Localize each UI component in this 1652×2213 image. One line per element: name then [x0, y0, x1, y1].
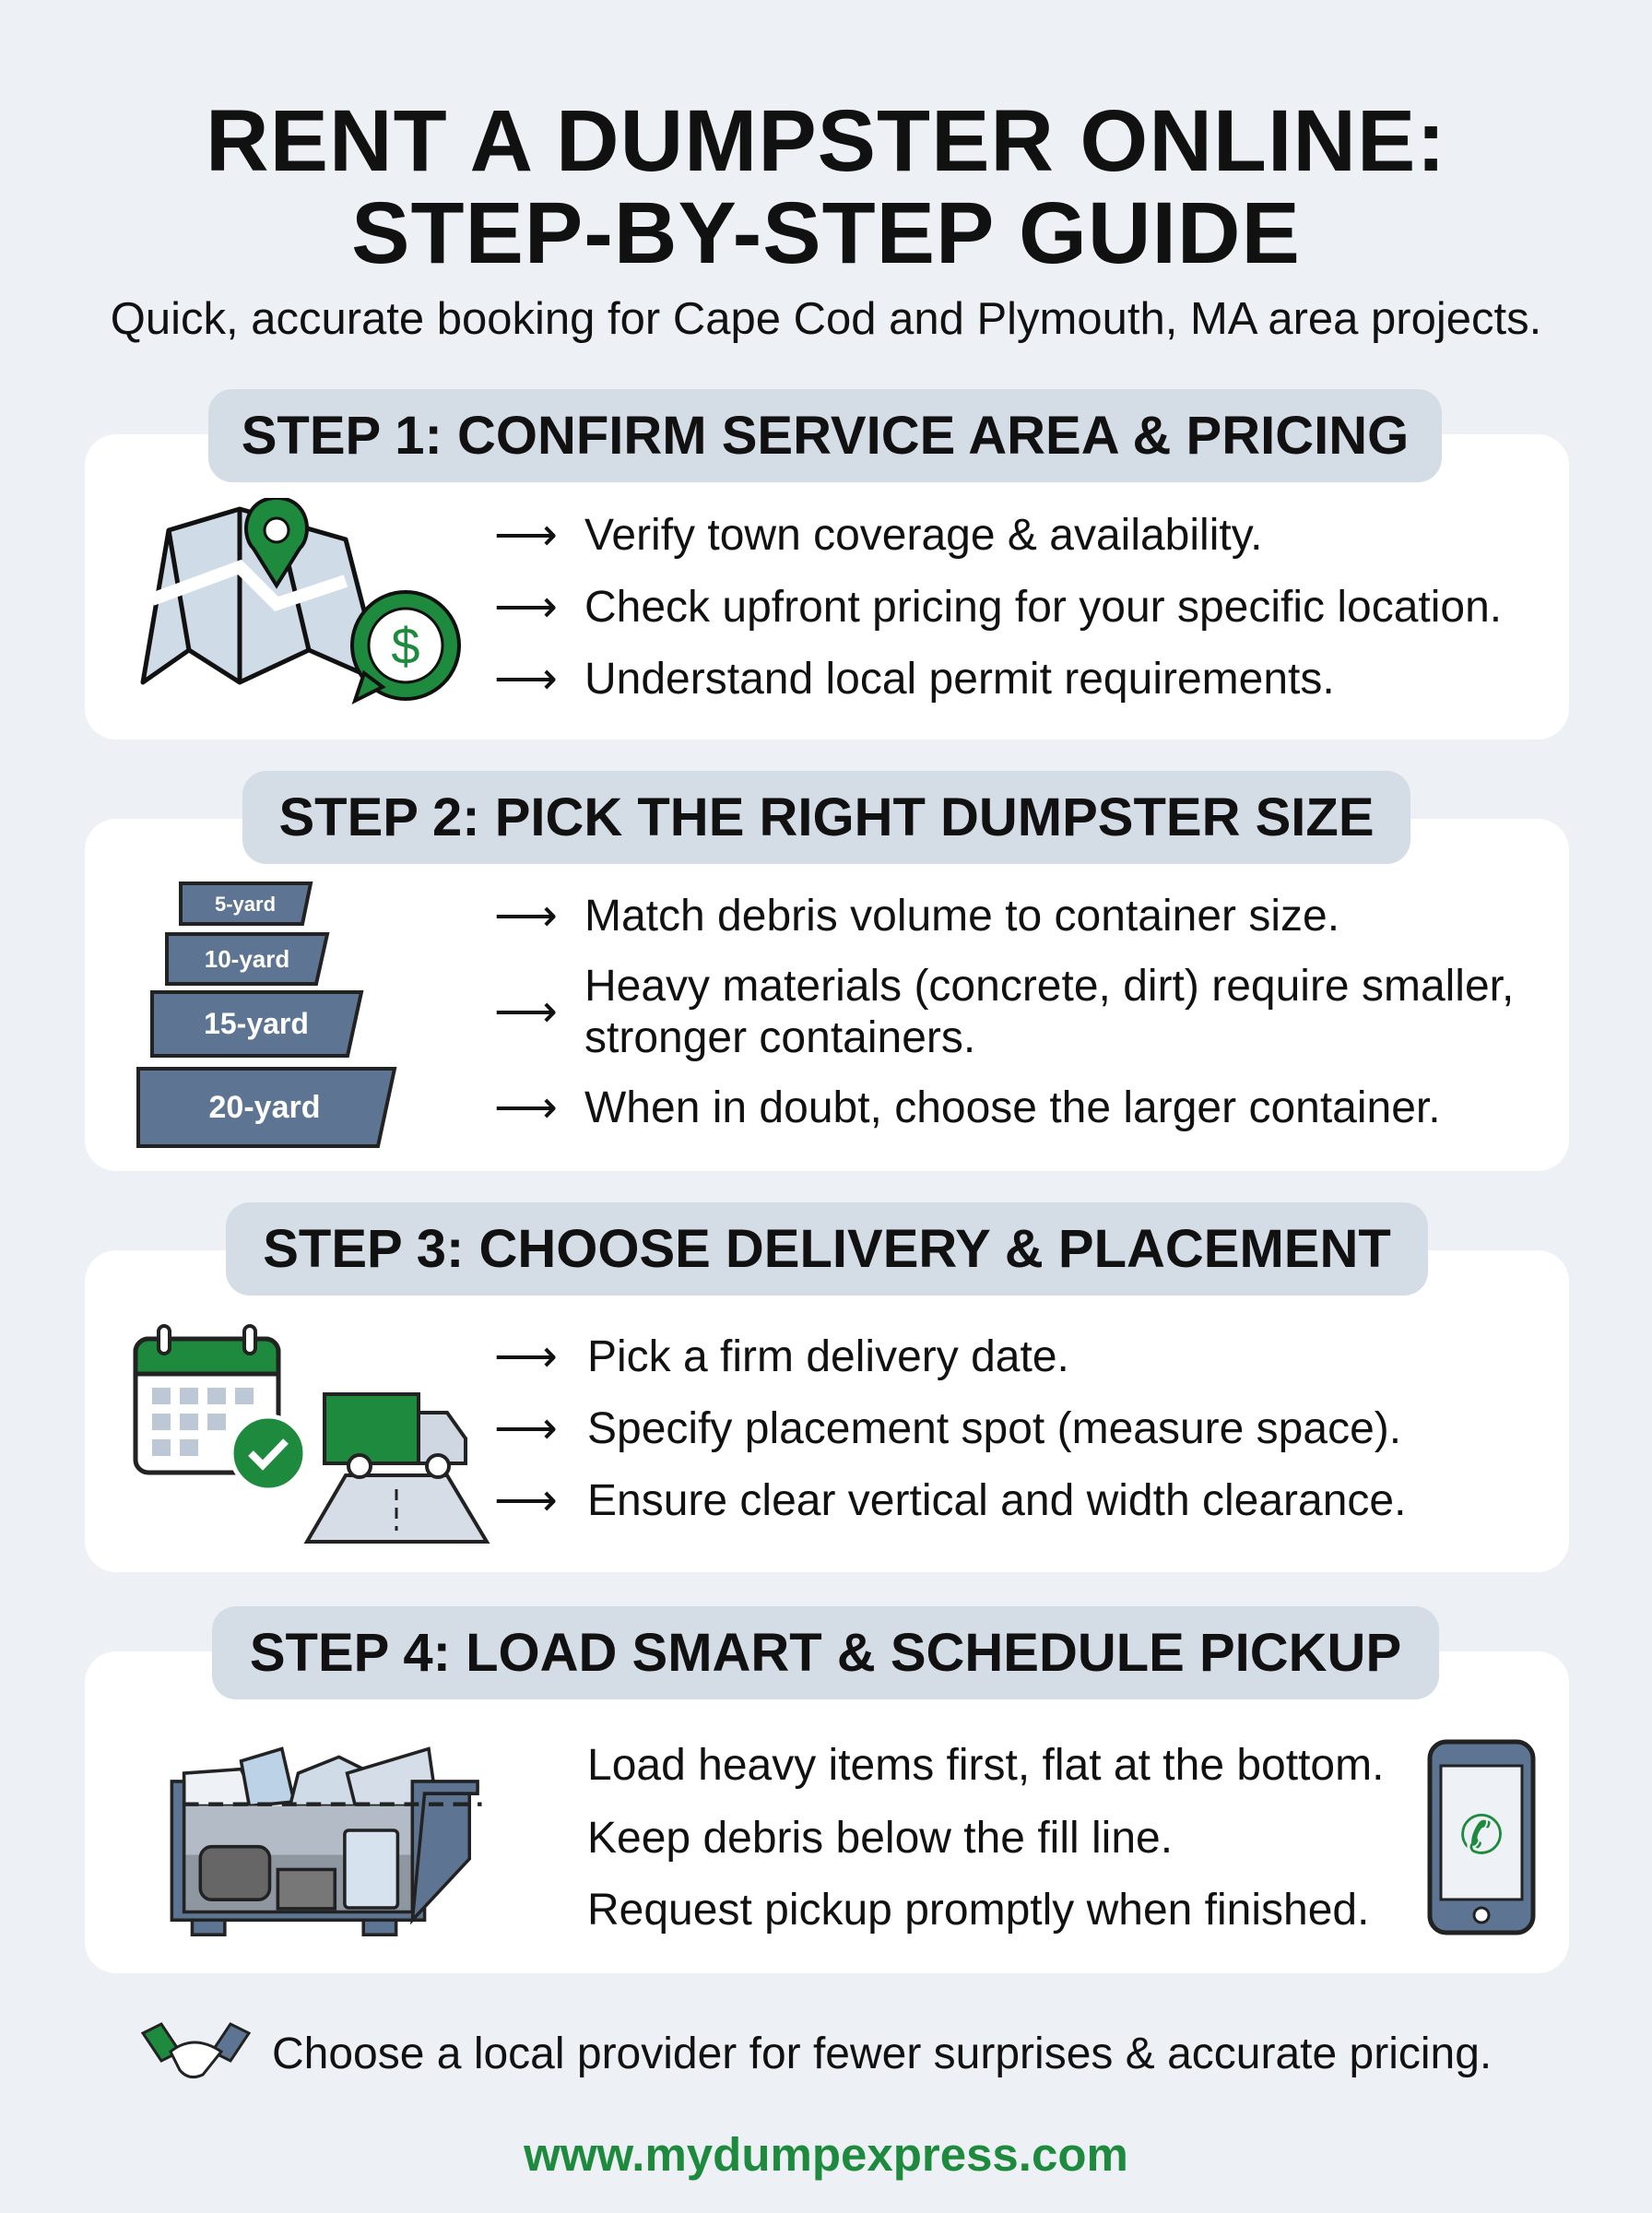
- bullets: step 4: Load heavy items first, flat at the bottom.: [587, 1741, 1384, 1790]
- bullets: step 4: Request pickup promptly when finished.: [587, 1886, 1369, 1935]
- icon: stacked dumpster sizes: 5-yard: [215, 893, 276, 916]
- bullets: step 1: ⟶: [494, 583, 558, 632]
- icon: stacked dumpster sizes: [136, 882, 396, 1148]
- heading: step 4: [212, 1606, 1439, 1699]
- icon: calendar and truck: [133, 1324, 490, 1544]
- panel: step 2: [85, 819, 1569, 1171]
- bullets: step 3: Specify placement spot (measure space).: [587, 1404, 1401, 1453]
- bullets: step 2: ⟶: [494, 988, 558, 1036]
- panel: step 3: [85, 1250, 1569, 1572]
- icon: loaded dumpster: [170, 1746, 481, 1936]
- url: www.mydumpexpress.com: [524, 2128, 1128, 2181]
- bullets: step 1: Verify town coverage & availability.: [584, 511, 1262, 560]
- bullets: step 2: When in doubt, choose the larger container.: [584, 1083, 1441, 1132]
- bullets: step 2: stronger containers.: [584, 1013, 975, 1062]
- bullets: step 3: Pick a firm delivery date.: [587, 1332, 1069, 1381]
- bullets: step 4: Keep debris below the fill line.: [587, 1814, 1173, 1863]
- icon: phone: ✆: [1459, 1805, 1504, 1865]
- bullets: step 4: [587, 1741, 1384, 1935]
- icon: map with pin and dollar: $: [391, 617, 420, 675]
- bullets: step 3: ⟶: [494, 1332, 558, 1381]
- bullets: step 1: Check upfront pricing for your specific location.: [584, 583, 1502, 632]
- heading: step 1: [208, 389, 1442, 482]
- heading: step 2: STEP 2: PICK THE RIGHT DUMPSTER SIZE: [278, 787, 1375, 847]
- icon: map with pin and dollar: [140, 498, 461, 704]
- heading: step 4: STEP 4: LOAD SMART & SCHEDULE PICKUP: [250, 1623, 1401, 1683]
- bullets: step 2: Heavy materials (concrete, dirt) require smaller,: [584, 962, 1514, 1011]
- bullets: step 3: [494, 1332, 1406, 1525]
- footer note: Choose a local provider for fewer surprises & accurate pricing.: [272, 2030, 1492, 2078]
- icon: stacked dumpster sizes: 15-yard: [204, 1007, 309, 1040]
- heading: step 1: STEP 1: CONFIRM SERVICE AREA & PRICING: [242, 406, 1409, 466]
- icon: handshake: [140, 2022, 251, 2078]
- bullets: step 1: ⟶: [494, 511, 558, 560]
- icon: phone: [1427, 1739, 1536, 1935]
- heading: step 3: [226, 1202, 1428, 1296]
- subtitle: Quick, accurate booking for Cape Cod and Plymouth, MA area projects.: [111, 294, 1541, 344]
- bullets: step 1: [494, 511, 1502, 704]
- panel: step 1: [85, 434, 1569, 740]
- panel: step 4: [85, 1651, 1569, 1973]
- bullets: step 3: ⟶: [494, 1476, 558, 1525]
- heading: step 2: [242, 771, 1410, 864]
- bullets: step 3: Ensure clear vertical and width clearance.: [587, 1476, 1406, 1525]
- heading: step 3: STEP 3: CHOOSE DELIVERY & PLACEMENT: [263, 1219, 1391, 1279]
- icon: stacked dumpster sizes: 20-yard: [209, 1090, 320, 1125]
- bullets: step 3: ⟶: [494, 1404, 558, 1453]
- title: STEP-BY-STEP GUIDE: [351, 184, 1301, 282]
- bullets: step 1: Understand local permit requirements.: [584, 655, 1335, 704]
- title: RENT A DUMPSTER ONLINE:: [206, 92, 1446, 190]
- bullets: step 2: Match debris volume to container size.: [584, 892, 1339, 941]
- bullets: step 1: ⟶: [494, 655, 558, 704]
- bullets: step 2: ⟶: [494, 1083, 558, 1132]
- title: [206, 92, 1446, 282]
- icon: stacked dumpster sizes: 10-yard: [205, 945, 289, 973]
- bullets: step 2: ⟶: [494, 892, 558, 941]
- bullets: step 2: [494, 892, 1514, 1132]
